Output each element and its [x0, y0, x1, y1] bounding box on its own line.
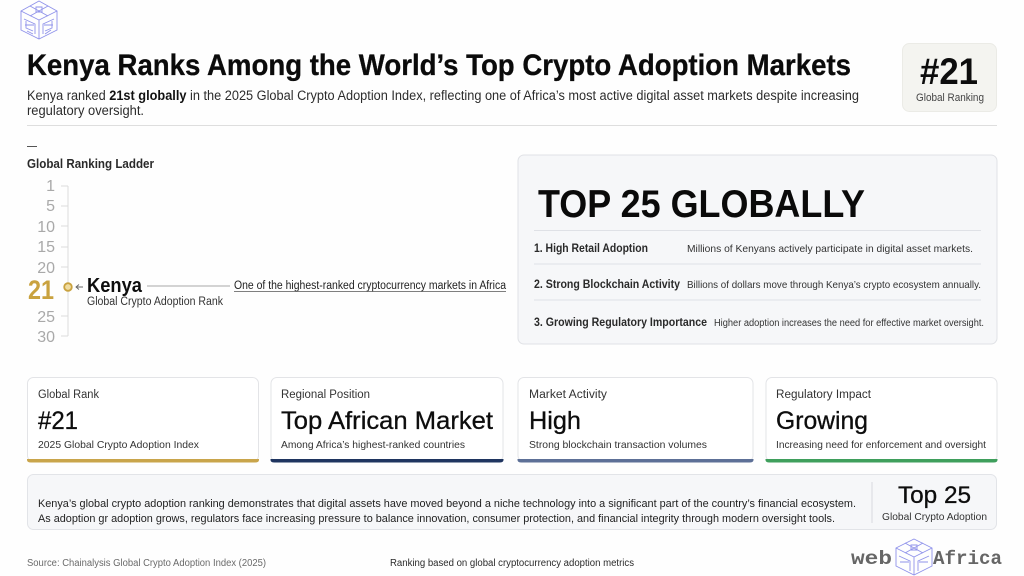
- row 1: Millions of Kenyans actively participate in digital asset markets.: [687, 243, 973, 255]
- card: market activity: Strong blockchain transaction volumes: [529, 439, 707, 451]
- card: global rank: [27, 378, 259, 462]
- card: global rank: Global Rank: [38, 389, 99, 401]
- title: Kenya Ranks Among the World’s Top Crypto Adoption Markets: [27, 49, 851, 82]
- chart: global ranking ladder: Global Crypto Adoption Rank: [87, 296, 223, 308]
- ladder axis: [61, 186, 68, 336]
- ladder rank numbers: 10: [37, 219, 55, 236]
- Kenya label: Kenya: [87, 275, 143, 297]
- card: regulatory impact: Regulatory Impact: [776, 389, 872, 401]
- card: market activity: [518, 378, 754, 462]
- card: regulatory impact: Increasing need for enforcement and oversight: [776, 439, 986, 451]
- summary text: Kenya’s global crypto adoption ranking demonstrates that digital assets have moved beyond a niche technology into a significant part of the country’s financial ecosystem.: [38, 498, 856, 510]
- summary stat: [882, 482, 987, 523]
- summary stat: Top 25: [898, 482, 971, 509]
- panel: summary: [28, 474, 996, 530]
- source note: Source: Chainalysis Global Crypto Adoption Index (2025): [27, 558, 266, 569]
- badge: global ranking: #21: [920, 51, 978, 92]
- logo: web3Africa: [851, 539, 1002, 575]
- chart: global ranking ladder: [27, 146, 507, 346]
- connector line: [147, 285, 230, 287]
- row 2: 2. Strong Blockchain Activity: [534, 279, 681, 291]
- ladder rank numbers: 15: [37, 239, 55, 256]
- highlighted rank 21: 21: [28, 275, 54, 305]
- card: global rank: #21: [38, 407, 78, 435]
- summary text: [38, 498, 856, 525]
- methodology note: Ranking based on global cryptocurrency adoption metrics: [390, 558, 634, 569]
- marker: Kenya position: [64, 283, 72, 291]
- row 3: [534, 317, 984, 329]
- callout text: One of the highest-ranked cryptocurrency markets in Africa: [234, 280, 507, 292]
- card: regional position: [270, 378, 504, 462]
- ladder rank numbers: 5: [46, 198, 55, 215]
- summary stat: Global Crypto Adoption: [882, 511, 987, 523]
- ladder rank numbers: 25: [37, 309, 55, 326]
- row 2: [534, 279, 981, 291]
- arrow: to Kenya marker: [76, 284, 83, 290]
- subtitle text: Kenya ranked 21st globally in the 2025 Global Crypto Adoption Index, reflecting one of Africa’s most active digital asset markets despite increasing: [27, 88, 859, 103]
- card: global rank: 2025 Global Crypto Adoption Index: [38, 439, 200, 451]
- logo: web3Africa: web: [851, 548, 892, 570]
- logo: web3Africa: Africa: [933, 548, 1002, 570]
- card: regional position: Top African Market: [281, 407, 493, 435]
- row 3: 3. Growing Regulatory Importance: [534, 317, 707, 329]
- ladder heading: Global Ranking Ladder: [27, 157, 154, 171]
- summary text: As adoption gr adoption grows, regulators face increasing pressure to balance innovation, consumer protection, and financial integrity through modern oversight tools.: [38, 513, 835, 525]
- ladder rank numbers: 20: [37, 260, 55, 277]
- icon: top-left cube logo: [21, 1, 57, 39]
- panel: top 25 globally: [518, 155, 997, 344]
- card: regional position: Among Africa’s highest-ranked countries: [281, 439, 465, 451]
- subtitle text: regulatory oversight.: [27, 103, 144, 118]
- card: regulatory impact: Growing: [776, 407, 868, 435]
- card: regulatory impact: [766, 378, 998, 462]
- row 1: 1. High Retail Adoption: [534, 243, 648, 255]
- ladder rank numbers: 1: [46, 178, 55, 195]
- card: regional position: Regional Position: [281, 389, 370, 401]
- card: market activity: High: [529, 407, 581, 435]
- subtitle text: [27, 88, 859, 118]
- row 2: Billions of dollars move through Kenya’s crypto ecosystem annually.: [687, 279, 981, 291]
- card: market activity: Market Activity: [529, 389, 607, 401]
- panel heading: TOP 25 GLOBALLY: [538, 183, 865, 226]
- row 3: Higher adoption increases the need for effective market oversight.: [714, 318, 984, 329]
- ladder rank numbers: [37, 178, 55, 346]
- badge: global ranking: [902, 44, 996, 112]
- row 1: [534, 243, 973, 255]
- badge: global ranking: Global Ranking: [916, 92, 984, 104]
- ladder rank numbers: 30: [37, 329, 55, 346]
